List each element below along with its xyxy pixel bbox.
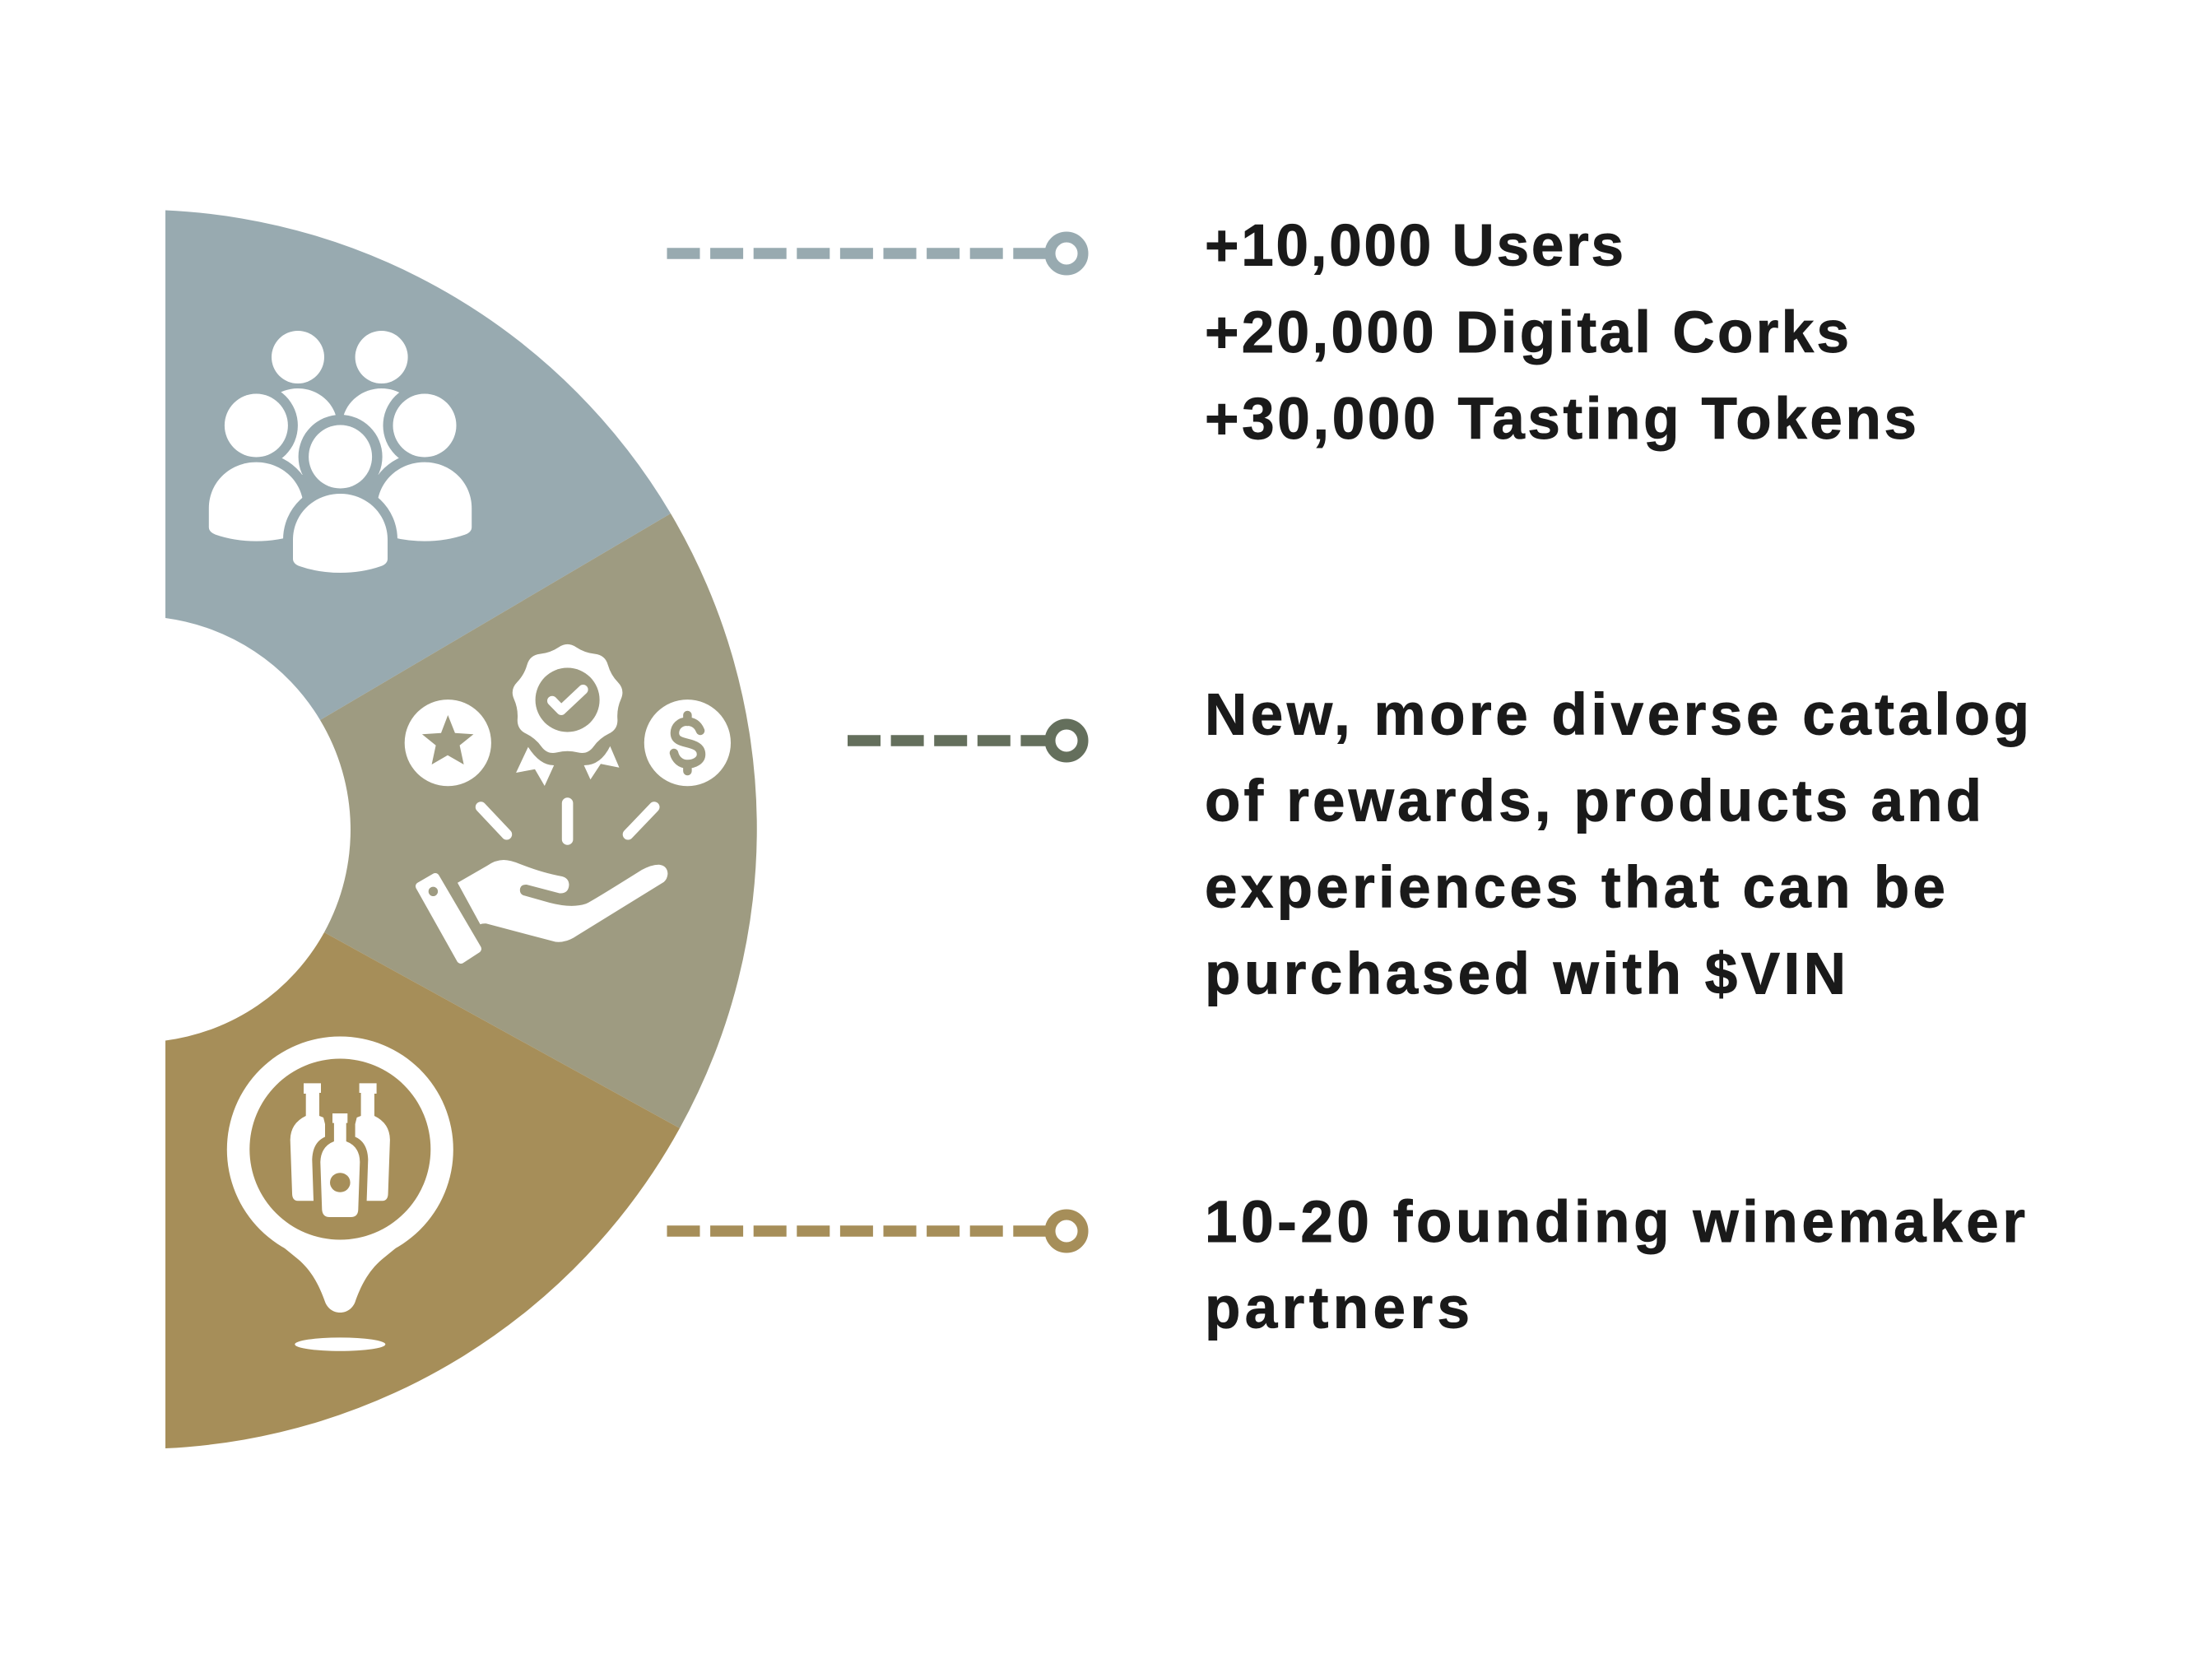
pin shadow xyxy=(295,1337,385,1351)
back left person xyxy=(258,331,337,475)
text block: rewards catalog: of rewards, products and xyxy=(1205,769,1982,834)
middle right person xyxy=(377,383,472,541)
segment: olive wedge xyxy=(320,514,757,1128)
text block: user metrics: +10,000 Users xyxy=(1205,214,1624,279)
text block: user metrics: +30,000 Tasting Tokens xyxy=(1205,387,1917,452)
icon: star coin xyxy=(405,699,491,786)
icon: dollar coin xyxy=(644,699,731,786)
panel: users segment xyxy=(165,211,671,720)
segment: gold wedge xyxy=(165,932,680,1448)
text block: winemaker partners: partners xyxy=(1205,1276,1470,1341)
icon: three rays xyxy=(481,803,654,839)
text block: rewards catalog xyxy=(1205,683,2029,1007)
pin shape xyxy=(227,1037,453,1313)
text block: rewards catalog: New, more diverse catalog xyxy=(1205,683,2029,748)
middle left person xyxy=(209,383,304,541)
icon: award badge with check xyxy=(513,644,622,786)
icon: map pin with wine bottles xyxy=(227,1037,453,1351)
front person xyxy=(293,415,388,573)
segment: blue wedge xyxy=(165,211,671,720)
text block: rewards catalog: experiences that can be xyxy=(1205,856,1945,921)
connector: blue dashed line xyxy=(667,237,1083,270)
three wine bottles xyxy=(290,1083,390,1217)
icon: rewards in open hand xyxy=(405,644,731,960)
connector: gold dashed line xyxy=(667,1215,1083,1248)
back right person xyxy=(342,331,421,475)
icon: group of people xyxy=(209,331,472,573)
panel: rewards segment xyxy=(320,514,757,1128)
text block: user metrics: +20,000 Digital Corks xyxy=(1205,300,1849,365)
text block: user metrics xyxy=(1205,214,1917,452)
text block: rewards catalog: purchased with $VIN xyxy=(1205,942,1846,1007)
text block: winemaker partners: 10-20 founding winemaker xyxy=(1205,1190,2025,1255)
text block: winemaker partners xyxy=(1205,1190,2025,1341)
connector: green dashed line xyxy=(848,724,1083,757)
icon: open hand xyxy=(420,860,667,960)
panel: winemakers segment xyxy=(165,932,680,1448)
